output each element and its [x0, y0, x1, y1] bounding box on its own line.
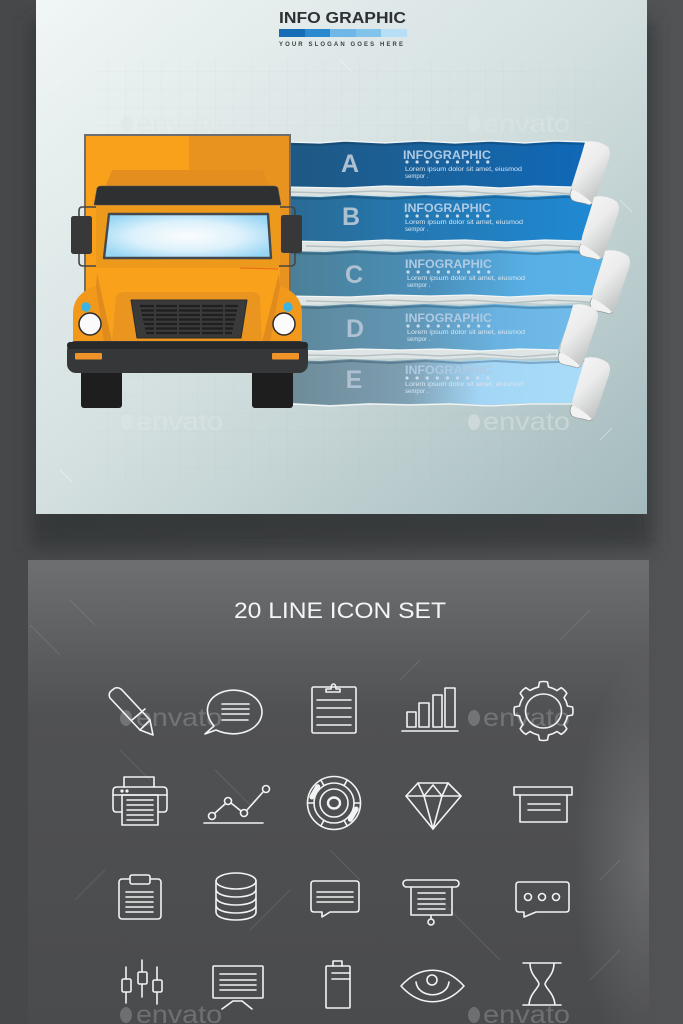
bumper	[67, 341, 308, 373]
cargo box	[85, 135, 290, 295]
strip E: INFOGRAPHIC	[405, 365, 492, 377]
icon: printer	[113, 777, 167, 825]
panel: infographic	[36, 0, 647, 514]
icon: clipboard	[312, 684, 356, 733]
watermark: envato: envato	[483, 408, 570, 436]
watermark: envato: envato	[136, 110, 223, 138]
icon: chat dots	[516, 882, 569, 917]
strip A: Lorem ipsum dolor sit amet, eiusmod	[405, 167, 522, 173]
truck	[67, 135, 308, 408]
icon: chat rectangle	[311, 881, 359, 917]
icon: projector screen	[403, 880, 459, 925]
strip A	[285, 141, 587, 195]
heading: info graphic: YOUR SLOGAN GOES HERE	[279, 42, 403, 48]
strip A: A	[341, 150, 359, 178]
strip E	[285, 359, 587, 406]
icon: notes clipboard	[119, 875, 161, 919]
strip E: sempor .	[405, 389, 429, 395]
strip E: Lorem ipsum dolor sit amet, eiusmod	[405, 382, 523, 388]
icon: eye	[401, 970, 464, 1002]
paper curl D	[558, 304, 598, 368]
visor	[94, 186, 281, 205]
strip B: B	[342, 203, 360, 231]
icon: gear	[513, 681, 574, 741]
icon: sliders	[122, 960, 162, 1004]
icon: speech bubble	[205, 690, 262, 734]
wheels	[81, 370, 293, 408]
strip D	[285, 304, 575, 360]
paper curl C	[590, 250, 630, 314]
watermark: envato	[121, 110, 570, 436]
heading: info graphic	[279, 10, 407, 48]
cab	[73, 204, 302, 342]
strip B: sempor .	[405, 227, 429, 233]
strip C: INFOGRAPHIC	[405, 259, 492, 271]
watermark: envato: envato	[136, 704, 222, 732]
strip E: E	[346, 366, 362, 394]
icon: presentation board	[213, 966, 263, 1009]
icon: chip	[308, 776, 360, 830]
heading: 20 line icon set: 20 LINE ICON SET	[234, 598, 446, 623]
strip D: INFOGRAPHIC	[405, 313, 492, 325]
mirrors	[71, 207, 302, 266]
strip B	[285, 195, 596, 251]
icon: bar chart	[402, 688, 458, 731]
strip D: sempor .	[407, 337, 431, 343]
strip C: sempor .	[407, 283, 431, 289]
strip B: Lorem ipsum dolor sit amet, eiusmod	[405, 220, 523, 226]
windshield	[104, 214, 271, 258]
watermark: envato	[120, 704, 570, 1024]
paper curl E	[570, 357, 610, 421]
strip D: D	[346, 315, 364, 343]
panel: icon set	[28, 560, 683, 1024]
icon: diamond	[406, 783, 461, 829]
heading: info graphic: INFO GRAPHIC	[279, 10, 406, 27]
icon: archive box	[514, 787, 572, 822]
icon: database	[216, 873, 256, 920]
watermark: envato: envato	[136, 408, 223, 436]
strip B: INFOGRAPHIC	[404, 203, 491, 215]
strip C: Lorem ipsum dolor sit amet, eiusmod	[407, 276, 525, 282]
icon: pencil	[109, 688, 153, 735]
headlights	[79, 302, 295, 335]
icon: battery	[326, 961, 350, 1008]
icon: line chart	[204, 786, 270, 823]
strip A: INFOGRAPHIC	[403, 150, 491, 162]
watermark: envato: envato	[483, 110, 570, 138]
grille	[131, 300, 247, 338]
strip A: sempor .	[405, 174, 429, 180]
watermark: envato: envato	[483, 704, 570, 732]
icon: hourglass	[523, 963, 561, 1005]
paper curl A	[570, 141, 610, 205]
paper curl B	[579, 196, 619, 260]
strip D: Lorem ipsum dolor sit amet, eiusmod	[407, 330, 525, 336]
strip C	[285, 250, 607, 305]
strip C: C	[345, 261, 363, 289]
